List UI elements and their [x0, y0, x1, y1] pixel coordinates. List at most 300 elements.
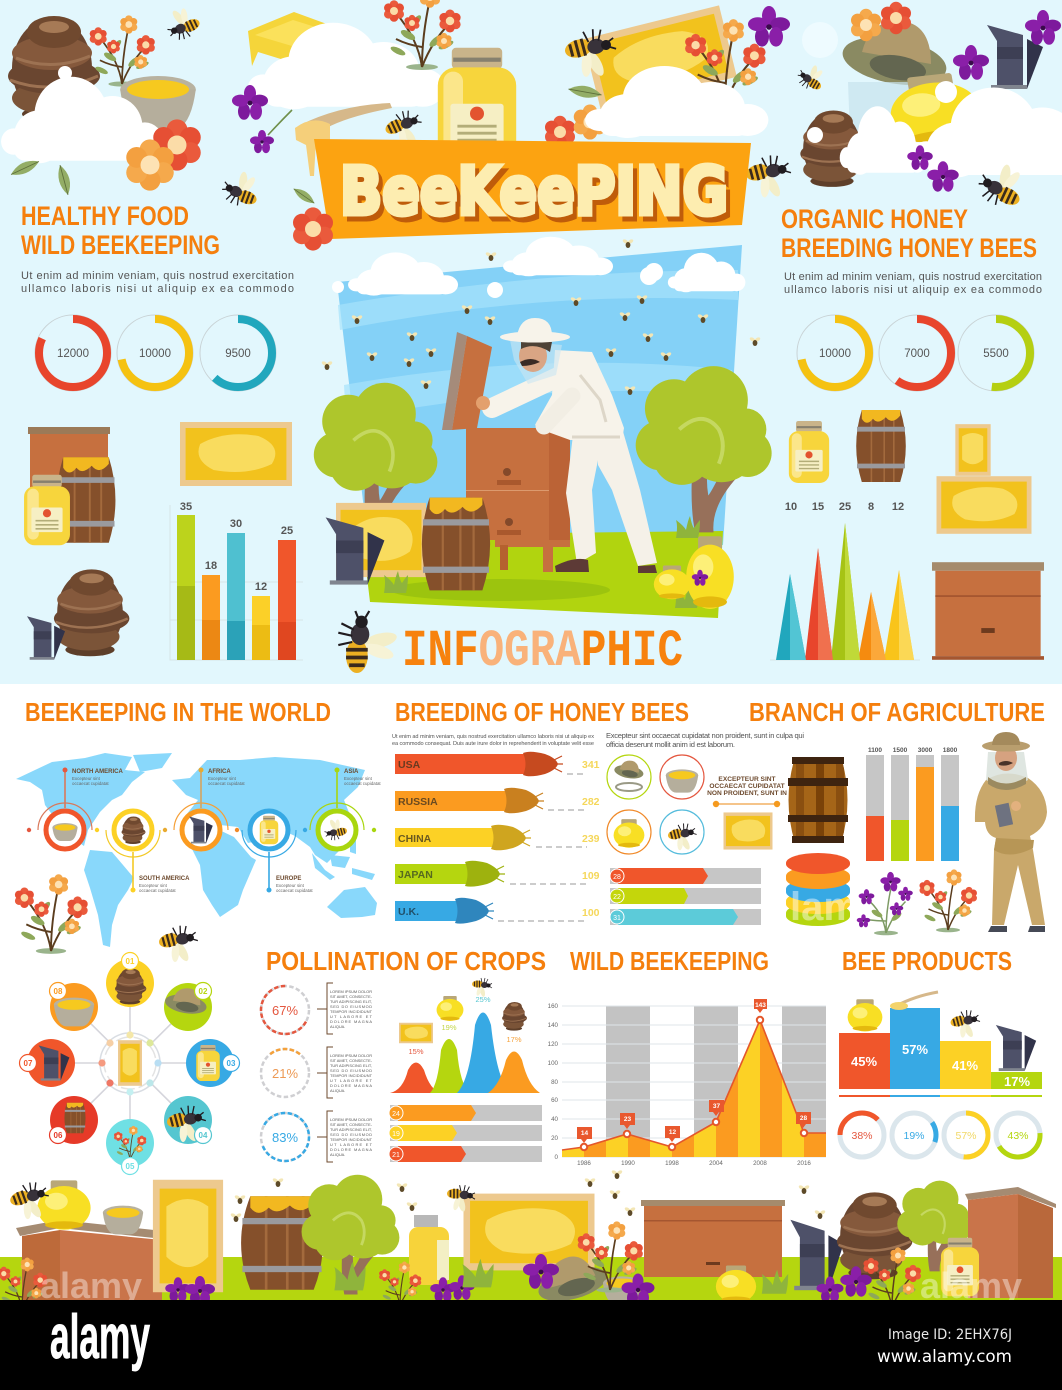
- product values: 41%: [952, 1058, 978, 1073]
- bar: Russia 282: [395, 788, 600, 813]
- icon: left tree: [314, 383, 437, 534]
- stacked columns chart: 1100: [868, 747, 882, 754]
- color rule: [839, 1095, 1042, 1097]
- data flags: [577, 999, 811, 1143]
- icon: veil: [848, 82, 960, 135]
- bar: UK 100: [395, 898, 600, 924]
- progress bars: 28, 22, 31: 22: [613, 894, 621, 901]
- callout text: NON PROIDENT, SUNT IN: [707, 790, 787, 797]
- hub item 02 hat: 02: [199, 987, 208, 996]
- donut 67%: 67%: [272, 1003, 298, 1018]
- panel: bee products: [839, 992, 1042, 1166]
- watermark bottom: [40, 1265, 1022, 1306]
- lighter ground patch: [390, 579, 610, 601]
- x axis labels: 1986: [577, 1160, 591, 1167]
- icon: bottom right jar: [941, 1238, 979, 1296]
- icon: bottom center frame: [464, 1194, 594, 1270]
- y axis labels: 120: [548, 1041, 559, 1048]
- icon: horizontal frame: [936, 476, 1032, 534]
- area yellow: [562, 1020, 826, 1157]
- donut: right 10000: 10000: [819, 348, 851, 360]
- chart grid: [562, 1006, 826, 1157]
- bracket text 2: TEMPOR INCIDIDUNT: [330, 1073, 373, 1078]
- progress bars: 24, 19, 21: [389, 1105, 542, 1162]
- icon: bottom right tall box: [965, 1187, 1056, 1298]
- bracket text 1: LOREM IPSUM DOLOR: [330, 989, 372, 994]
- flag values: 14: [581, 1130, 588, 1137]
- icon: small bees near scene: [230, 1169, 826, 1222]
- icon: grass and jars: [384, 516, 734, 609]
- hub item 04 bee: 04: [199, 1131, 208, 1140]
- flag values: 143: [755, 1002, 766, 1009]
- icon: right bee: [974, 156, 1031, 213]
- icon: big barrel: [241, 1196, 323, 1290]
- progress bars: 28, 22, 31: 28: [613, 874, 621, 881]
- y axis labels: 100: [548, 1060, 559, 1067]
- hub item 03 jar: 03: [227, 1059, 236, 1068]
- flag values: 37: [713, 1103, 720, 1110]
- panel: hub diagram: [20, 952, 240, 1174]
- product values: 57%: [902, 1042, 928, 1057]
- icon circle: bowl: [660, 755, 704, 799]
- hub item 01 skep: 01: [126, 957, 135, 966]
- bracket text 3: TUR ADIPISCING ELIT,: [330, 1127, 372, 1132]
- icon: frame: [180, 422, 292, 486]
- panel: world map: [16, 753, 381, 947]
- panel: top-left heading: [21, 201, 294, 295]
- icon: right purple flowers: [851, 2, 1061, 192]
- icon: left red flowers: [126, 119, 201, 191]
- icon: barrel: [57, 457, 115, 543]
- icon: frame on ground: [336, 503, 426, 577]
- bar: Japan 109: 109: [582, 870, 600, 882]
- ring 57%: 57%: [955, 1130, 977, 1142]
- map leaders and dots: [27, 768, 376, 892]
- product bars: [839, 1008, 1042, 1089]
- icon: bee below clouds: [219, 166, 265, 211]
- bar: USA 341: [395, 752, 600, 776]
- panel: breeding of honey bees: [392, 734, 600, 924]
- ring 38%: 38%: [851, 1130, 873, 1142]
- map label: south america: [139, 876, 190, 893]
- icon: purple bush: [857, 872, 913, 935]
- icon: disc stack: lam: [790, 885, 859, 929]
- icon: bottom flowers: [0, 1221, 921, 1312]
- heading: beekeeping in the world: BEEKEEPING IN THE WORLD: [25, 697, 331, 727]
- hub item 04 bee: [164, 1096, 212, 1148]
- icon: bottom right tree: [897, 1181, 971, 1271]
- bracket text 3: DOLORE MAGNA: [330, 1147, 372, 1152]
- icon: hive lid: [442, 332, 492, 430]
- hub item 02 hat: [164, 982, 212, 1031]
- y axis labels: [548, 1003, 559, 1161]
- hub item 01 skep: [106, 952, 154, 1007]
- hub item 03 jar: [186, 1039, 240, 1087]
- donut: right 7000: 7000: [904, 348, 930, 360]
- x axis labels: 1998: [665, 1160, 679, 1167]
- bracket text 2: UT LABORE ET: [330, 1078, 373, 1083]
- icon: top flowers: [384, 0, 461, 70]
- ring 43%: 43%: [1007, 1130, 1029, 1142]
- heading: wild beekeeping: WILD BEEKEEPING: [570, 946, 769, 976]
- ring 19%: 19%: [903, 1130, 925, 1142]
- pyramid chart: right: [770, 501, 920, 660]
- icon: bee banner right: [743, 151, 796, 204]
- icon: jar: [789, 421, 829, 483]
- progress bars: 24, 19, 21: 21: [392, 1152, 400, 1159]
- pyramid chart: right: 15: [812, 501, 824, 513]
- map label: north america: [72, 769, 123, 786]
- breeding intro text: [392, 734, 594, 747]
- icon: wooden hive: [466, 428, 570, 572]
- panel: top-left heading: WILD BEEKEEPING: [21, 230, 220, 260]
- subtitle: INFOGRAPHIC: [402, 622, 683, 681]
- panel: top-right heading: Ut enim ad minim veniam, quis nostrud exercitation: [784, 271, 1042, 283]
- panel: top-left heading: Ut enim ad minim veniam, quis nostrud exercitation: [21, 270, 294, 282]
- panel: title banner: [291, 139, 751, 251]
- icons on bars: [848, 992, 1036, 1071]
- icon: purple flowers: [9, 85, 292, 196]
- icon circle: bee: [660, 810, 704, 854]
- icon: disc stack: [786, 853, 859, 929]
- bracket text 3: [317, 1111, 373, 1162]
- icon: tall frame: [153, 1180, 223, 1292]
- footer logo: alamy: [50, 1303, 150, 1372]
- map node: south america skep: [114, 811, 152, 849]
- bar chart: left: 30: [230, 518, 242, 530]
- footer image id: Image ID: 2EHX76J: [888, 1327, 1012, 1343]
- x axis labels: 2008: [753, 1160, 767, 1167]
- bracket text 2: LOREM IPSUM DOLOR: [330, 1053, 372, 1058]
- panel: pollination dash donuts: [251, 977, 373, 1170]
- flag values: 23: [624, 1116, 631, 1123]
- icon: small flying bee: [794, 60, 829, 94]
- bar: USA 341: USA: [398, 759, 421, 771]
- icon: bottom tree: [302, 1175, 399, 1294]
- heading: pollination of crops: POLLINATION OF CROPS: [266, 946, 546, 976]
- map label: africa: occaecat cupidatat: [208, 781, 245, 786]
- decorative right clouds: [802, 22, 1062, 178]
- progress bars: 28, 22, 31: 31: [613, 915, 621, 922]
- icon: banner flower: [291, 185, 333, 251]
- peak chart: pollination: 19%: [441, 1023, 457, 1032]
- ring 19%: [883, 1104, 945, 1166]
- donut: right 5500: 5500: [983, 348, 1009, 360]
- map connector rings: [38, 803, 364, 857]
- donut 83%: 83%: [272, 1130, 298, 1145]
- icon: wooden barrel: [422, 498, 490, 590]
- icon: bottom skep: [837, 1192, 912, 1279]
- bracket text 1: ALIQUA.: [330, 1024, 345, 1029]
- hub item 06 barrel: 06: [54, 1131, 63, 1140]
- donut: 10000: [117, 315, 193, 391]
- hub item 06 barrel: [50, 1096, 98, 1144]
- icon: left skep hive: [8, 16, 100, 122]
- donut: right 5500: [958, 315, 1034, 391]
- icon: hat on ground: [528, 1244, 615, 1318]
- icon: honeycomb: [248, 12, 335, 70]
- stacked columns chart: 3000: [918, 747, 933, 754]
- hub center ring: [100, 1033, 160, 1093]
- icon: bottom smoker: [790, 1220, 844, 1290]
- stacked columns chart: [866, 747, 959, 861]
- y axis labels: 20: [551, 1135, 559, 1142]
- icon: top honey jar: [438, 48, 516, 168]
- map label: europe: [276, 876, 313, 893]
- icon: tall jar: [409, 1215, 449, 1285]
- flag values: 12: [669, 1129, 676, 1136]
- watermark bottom: alamy: [920, 1265, 1022, 1306]
- map continents: [16, 753, 377, 947]
- icon: bottom left bee: [7, 1178, 55, 1226]
- bar: China 239: 239: [582, 833, 600, 845]
- footer website: www.alamy.com: [877, 1347, 1012, 1367]
- donut: right 10000: [797, 315, 873, 391]
- y axis labels: 160: [548, 1003, 559, 1010]
- icon: honey dipper: [295, 103, 392, 176]
- donut 21%: [251, 1039, 319, 1107]
- icon: yellow jar tilted: [885, 70, 985, 147]
- icon: box hive: [932, 562, 1044, 660]
- bar chart: left: 25: [281, 525, 293, 537]
- callout text: OCCAECAT CUPIDATAT: [709, 783, 785, 790]
- icon: large bee on frame: [561, 25, 622, 84]
- map label: europe: Excepteur sint: [276, 883, 305, 888]
- bar: China 239: CHINA: [398, 833, 432, 845]
- callout text: EXCEPTEUR SINT: [718, 776, 776, 783]
- map label: south america: Excepteur sint: [139, 883, 168, 888]
- bar: USA 341: 341: [582, 759, 600, 771]
- icon: smoker: [326, 517, 384, 585]
- map label: europe: occaecat cupidatat: [276, 888, 313, 893]
- donut 67%: [252, 977, 318, 1043]
- hub item 07 smoker: 07: [24, 1059, 33, 1068]
- map label: north america: Excepteur sint: [72, 776, 101, 781]
- y axis labels: 0: [555, 1154, 559, 1161]
- icon: left flowers: [90, 15, 155, 87]
- flying bees swarm: [321, 238, 761, 395]
- icon: box hive: [28, 427, 110, 514]
- hub item 08 bowl: [50, 982, 98, 1031]
- icon: map bee: [156, 922, 202, 968]
- panel: top-right heading: ORGANIC HONEY: [781, 204, 968, 234]
- stacked columns chart: 1800: [943, 747, 958, 754]
- peak chart: pollination: 17%: [506, 1035, 522, 1044]
- map label: asia: ASIA: [344, 769, 359, 775]
- progress bars: 28, 22, 31: [610, 868, 761, 925]
- ring 38%: [840, 1113, 884, 1157]
- pyramid chart: right: 8: [868, 501, 874, 513]
- area orange stripes: [584, 1020, 826, 1157]
- panel: top-left heading: HEALTHY FOOD: [21, 201, 189, 231]
- donut: 9500: [200, 315, 276, 391]
- stacked columns chart: 1500: [893, 747, 908, 754]
- pyramid chart: right: 25: [839, 501, 851, 513]
- y axis labels: 40: [551, 1116, 559, 1123]
- icon circle: hat: [607, 755, 651, 799]
- hub center frame: [118, 1040, 142, 1086]
- icon: vertical frame: [955, 424, 991, 476]
- icon: bottom center box: [641, 1200, 785, 1277]
- bracket text 3: SED DO EIUSMOD: [330, 1132, 372, 1137]
- pyramid chart: right: 10: [785, 501, 797, 513]
- map label: south america: SOUTH AMERICA: [139, 876, 190, 882]
- x axis labels: 2004: [709, 1160, 723, 1167]
- map label: asia: occaecat cupidatat: [344, 781, 381, 786]
- y axis labels: 80: [551, 1079, 559, 1086]
- peak chart: pollination: 25%: [475, 995, 491, 1004]
- ring 43%: [994, 1111, 1042, 1159]
- bracket text 1: DOLORE MAGNA: [330, 1019, 372, 1024]
- bracket text 3: SIT AMET, CONSECTE-: [330, 1122, 373, 1127]
- map label: south america: occaecat cupidatat: [139, 888, 176, 893]
- panel: bottom ground scene: [0, 1169, 1062, 1318]
- bracket text 2: [317, 1047, 373, 1098]
- hub node dots: [98, 1031, 162, 1096]
- decorative center cloud: [585, 66, 768, 138]
- breeding intro text: Ut enim ad minim veniam, quis nostrud exercitation ullamco laboris nisi ut aliquip ex: [392, 734, 594, 740]
- map node: africa smoker: [182, 811, 220, 849]
- bar chart: left: 35: [180, 501, 192, 513]
- watermark bottom: alamy: [40, 1265, 142, 1306]
- icon: honeycomb frame: [724, 812, 772, 850]
- donut: 12000: 12000: [57, 348, 89, 360]
- footer background: [0, 1300, 1062, 1390]
- hub item 07 smoker: [20, 1039, 75, 1087]
- icon: small jar: [716, 1266, 756, 1303]
- bar: Russia 282: RUSSIA: [398, 796, 438, 808]
- bracket text 1: UT LABORE ET: [330, 1014, 373, 1019]
- map label: north america: NORTH AMERICA: [72, 769, 123, 775]
- ground: [0, 1257, 1062, 1300]
- product values: 17%: [1004, 1074, 1030, 1089]
- donut: right 7000: [879, 315, 955, 391]
- bar: Japan 109: JAPAN: [398, 869, 433, 881]
- icon: skep: [54, 569, 129, 656]
- sky: [337, 245, 742, 560]
- x axis labels: [577, 1160, 811, 1167]
- donut 83%: [252, 1104, 318, 1170]
- chart icons: [399, 978, 527, 1043]
- area line: [562, 1020, 826, 1150]
- map label: africa: [208, 769, 245, 786]
- icon: barrel: [856, 410, 906, 482]
- product values: 45%: [851, 1054, 877, 1069]
- callout connector: [713, 801, 780, 807]
- bar: UK 100: U.K.: [398, 906, 419, 918]
- map label: asia: [344, 769, 381, 786]
- peak chart: pollination: 15%: [408, 1047, 424, 1056]
- panel: right product illustrations: [789, 410, 1044, 660]
- bracket text 3: ALIQUA.: [330, 1152, 345, 1157]
- map node: asia bee: [318, 811, 356, 849]
- figure: beekeeper in khaki suit: [975, 732, 1047, 932]
- icon: beekeeper hat: [839, 21, 950, 92]
- bracket text 3: TEMPOR INCIDIDUNT: [330, 1137, 373, 1142]
- decorative left clouds: [1, 23, 445, 163]
- bracket text 3: UT LABORE ET: [330, 1142, 373, 1147]
- icon: right smoker: [987, 25, 1043, 89]
- donut: 12000: [35, 315, 111, 391]
- hub spokes: [51, 983, 210, 1143]
- panel: central beekeeper scene: [314, 237, 772, 681]
- icon: left honey bowl: [120, 76, 196, 130]
- icon: top-left bee: [161, 2, 203, 44]
- icon: big barrel: [788, 757, 848, 843]
- bar: Japan 109: [395, 861, 600, 887]
- clouds over sky: [332, 237, 745, 298]
- map label: africa: Excepteur sint: [208, 776, 237, 781]
- bar: China 239: [395, 825, 600, 850]
- donut: 10000: 10000: [139, 348, 171, 360]
- icon: map flower bush: [15, 874, 88, 954]
- icon: bottom purple flowers: [165, 1254, 872, 1305]
- callout text: [707, 776, 787, 797]
- hub item 05 flowers: [106, 1119, 154, 1174]
- bracket text 2: ALIQUA.: [330, 1088, 345, 1093]
- hub item 05 flowers: 05: [126, 1162, 135, 1171]
- hub item 08 bowl: 08: [54, 987, 63, 996]
- panel: top-right heading: [781, 204, 1042, 296]
- icon: bee above frame: [447, 1185, 475, 1212]
- x axis labels: 1990: [621, 1160, 635, 1167]
- icon: bowl on ground: [603, 1276, 641, 1304]
- map node: north america bowl: [46, 811, 84, 849]
- bracket text 1: TEMPOR INCIDIDUNT: [330, 1009, 373, 1014]
- icon: bottom left bowl: [103, 1206, 143, 1234]
- map label: africa: AFRICA: [208, 769, 231, 775]
- y axis labels: 140: [548, 1022, 559, 1029]
- progress bars: 24, 19, 21: 24: [392, 1111, 400, 1118]
- bar chart: left: 18: [205, 560, 217, 572]
- bar: Russia 282: 282: [582, 796, 600, 808]
- map label: europe: EUROPE: [276, 876, 301, 882]
- icon: right center flowers: [545, 6, 790, 148]
- data points: [581, 1017, 807, 1150]
- panel: top-right heading: ullamco laboris nisi ut aliquip ex ea commodo: [784, 284, 1042, 296]
- pyramid chart: right: 12: [892, 501, 904, 513]
- panel: top decorative illustrations: [1, 0, 1062, 213]
- map node: europe jar: [250, 811, 288, 849]
- icon: large bee: [338, 611, 398, 673]
- panel: wild beekeeping area chart: [548, 999, 826, 1167]
- heading: breeding of honey bees: BREEDING OF HONEY BEES: [395, 697, 689, 727]
- agriculture intro text: [606, 731, 804, 749]
- icon: smoker: [27, 616, 65, 660]
- panel: top-left heading: ullamco laboris nisi ut aliquip ex ea commodo: [21, 283, 294, 295]
- bracket text 2: SIT AMET, CONSECTE-: [330, 1058, 373, 1063]
- title text: BeeKeePING: [344, 158, 732, 235]
- bracket text 1: [317, 983, 373, 1034]
- bar chart: left: [170, 501, 303, 660]
- donut 21%: 21%: [272, 1066, 298, 1081]
- map label: north america: occaecat cupidatat: [72, 781, 109, 786]
- icon: right skep: [800, 111, 867, 187]
- figure: beekeeper in white suit: [476, 318, 657, 573]
- icon: grass tufts: [334, 1259, 788, 1294]
- bracket text 1: SIT AMET, CONSECTE-: [330, 994, 373, 999]
- bracket text 2: DOLORE MAGNA: [330, 1083, 372, 1088]
- icon: bee near jar: [381, 106, 429, 153]
- map label: asia: Excepteur sint: [344, 776, 373, 781]
- icon circle: jar: [607, 810, 651, 854]
- bracket text 1: SED DO EIUSMOD: [330, 1004, 372, 1009]
- donut: 9500: 9500: [225, 348, 251, 360]
- icon: bottom left jar: [37, 1180, 91, 1230]
- flag values: [581, 1002, 807, 1137]
- bar chart: left: 12: [255, 581, 267, 593]
- icon: orange bush: [920, 869, 977, 932]
